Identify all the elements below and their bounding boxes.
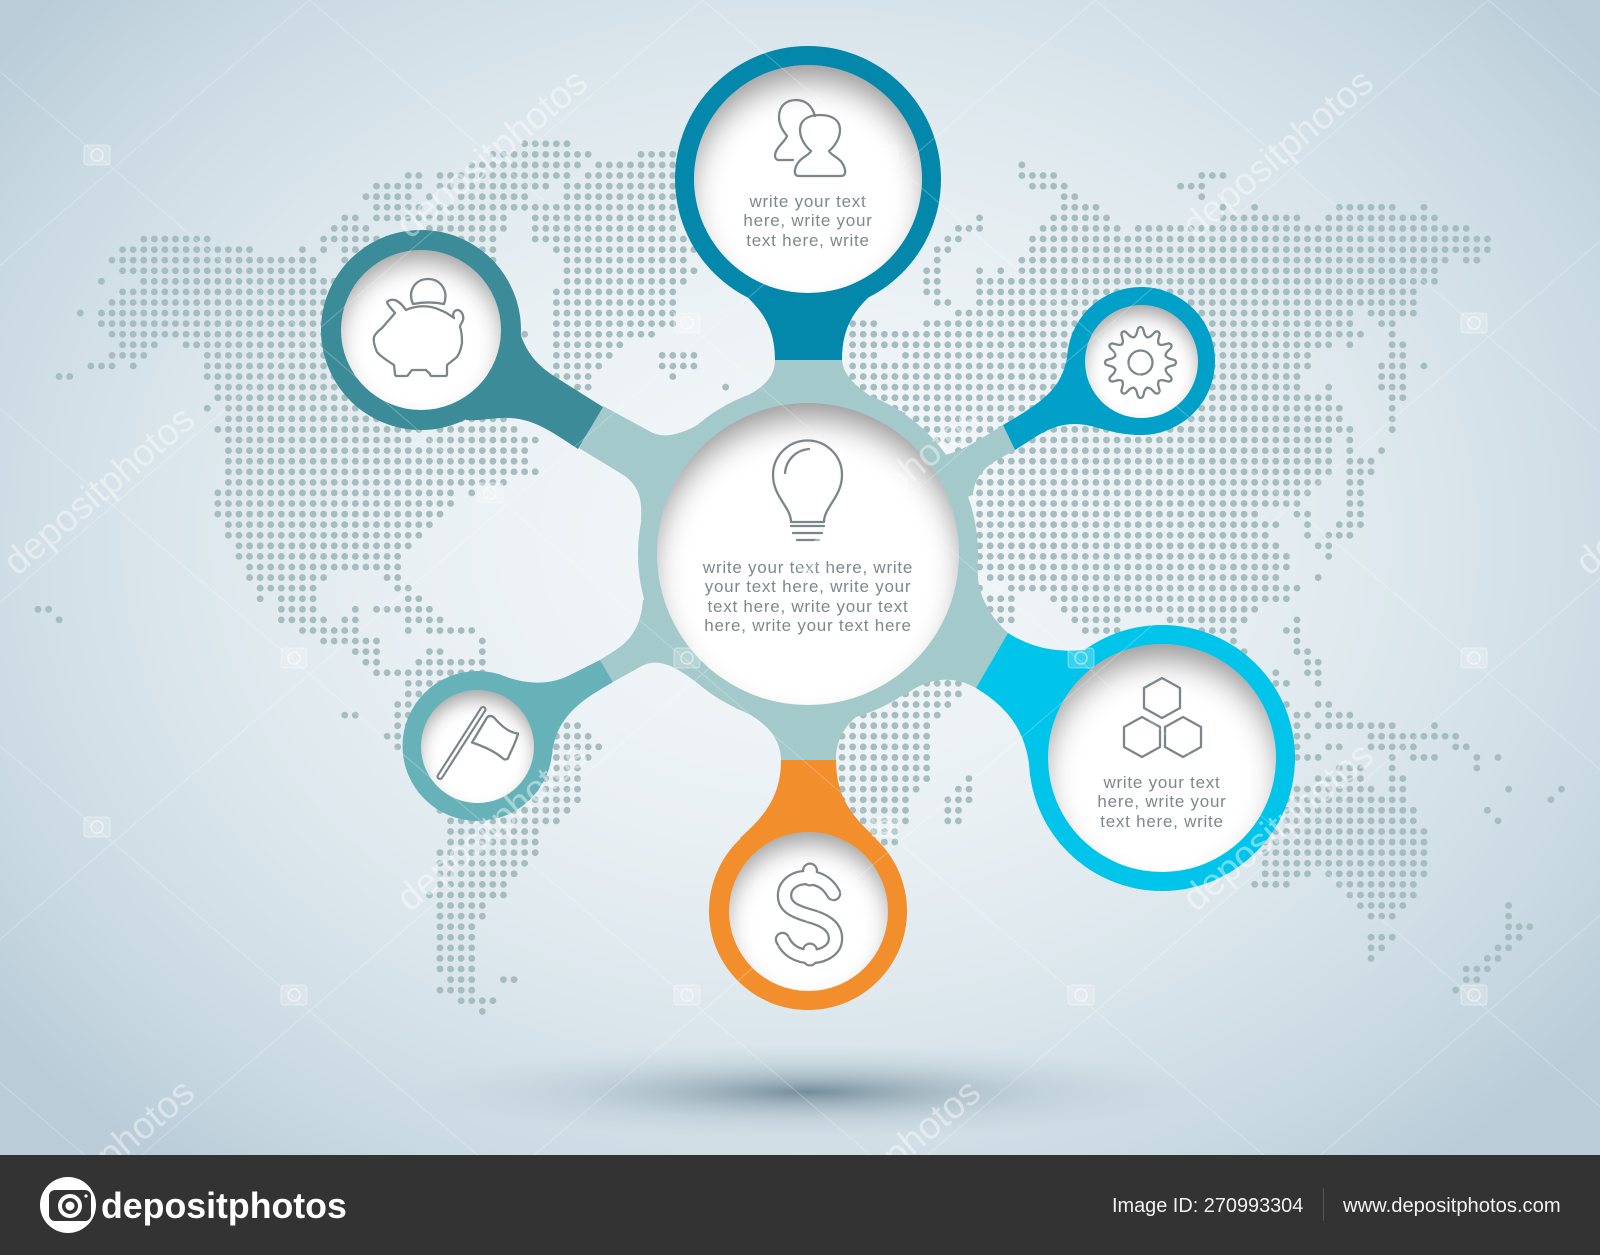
logo wordmark: depositphotos bbox=[101, 1186, 347, 1226]
icon: flag bbox=[436, 706, 520, 780]
hexagon text: text here, write bbox=[1100, 812, 1224, 831]
centre text: your text here, write your bbox=[705, 577, 911, 596]
icon: hexagons bbox=[1122, 676, 1202, 758]
panel: hexagon circle bbox=[1048, 644, 1276, 872]
centre text: here, write your text here bbox=[704, 616, 912, 635]
top text: here, write your bbox=[743, 211, 873, 230]
hub ring and light connectors bbox=[579, 360, 1015, 760]
centre text: write your text here, write bbox=[703, 558, 913, 577]
icon: people bbox=[774, 98, 846, 178]
centre text: text here, write your text bbox=[708, 597, 908, 616]
top arm bbox=[675, 46, 941, 360]
icon: dollar sign bbox=[774, 862, 844, 966]
panel: dollar circle bbox=[728, 832, 888, 990]
panel: centre circle bbox=[657, 403, 959, 705]
hexagon text: here, write your bbox=[1097, 792, 1227, 811]
panel: piggy circle bbox=[341, 250, 501, 410]
image id: Image ID: 270993304 bbox=[1112, 1195, 1303, 1217]
watermark text: depositphotos bbox=[389, 734, 596, 920]
dollar arm bbox=[709, 760, 907, 1010]
panel: top circle bbox=[694, 65, 922, 293]
icon: gear bbox=[1104, 326, 1178, 400]
watermark text: depositphotos bbox=[389, 61, 596, 247]
flag arm bbox=[402, 660, 613, 821]
footer bar bbox=[0, 1155, 1600, 1255]
logo camera bbox=[40, 1177, 96, 1233]
panel: flag circle bbox=[421, 690, 534, 802]
top text: write your text bbox=[749, 192, 867, 211]
watermark text: depositphotos bbox=[1175, 734, 1382, 920]
hexagon arm bbox=[976, 625, 1295, 891]
top text: text here, write bbox=[746, 231, 870, 250]
icon: light bulb bbox=[772, 439, 844, 542]
icon: piggy bank bbox=[372, 278, 464, 378]
hexagon text: write your text bbox=[1103, 773, 1221, 792]
top text bbox=[743, 192, 873, 250]
watermark text: depositphotos bbox=[1175, 61, 1382, 247]
website: www.depositphotos.com bbox=[1342, 1195, 1561, 1217]
camera marks bbox=[84, 145, 1487, 1005]
centre text bbox=[702, 558, 913, 635]
piggy arm bbox=[321, 230, 603, 449]
panel: gear circle bbox=[1084, 304, 1198, 418]
gear arm bbox=[1003, 287, 1215, 450]
watermark text: depositphotos bbox=[782, 398, 989, 584]
hexagon text bbox=[1097, 773, 1227, 831]
watermark text: depositphotos bbox=[0, 398, 203, 584]
